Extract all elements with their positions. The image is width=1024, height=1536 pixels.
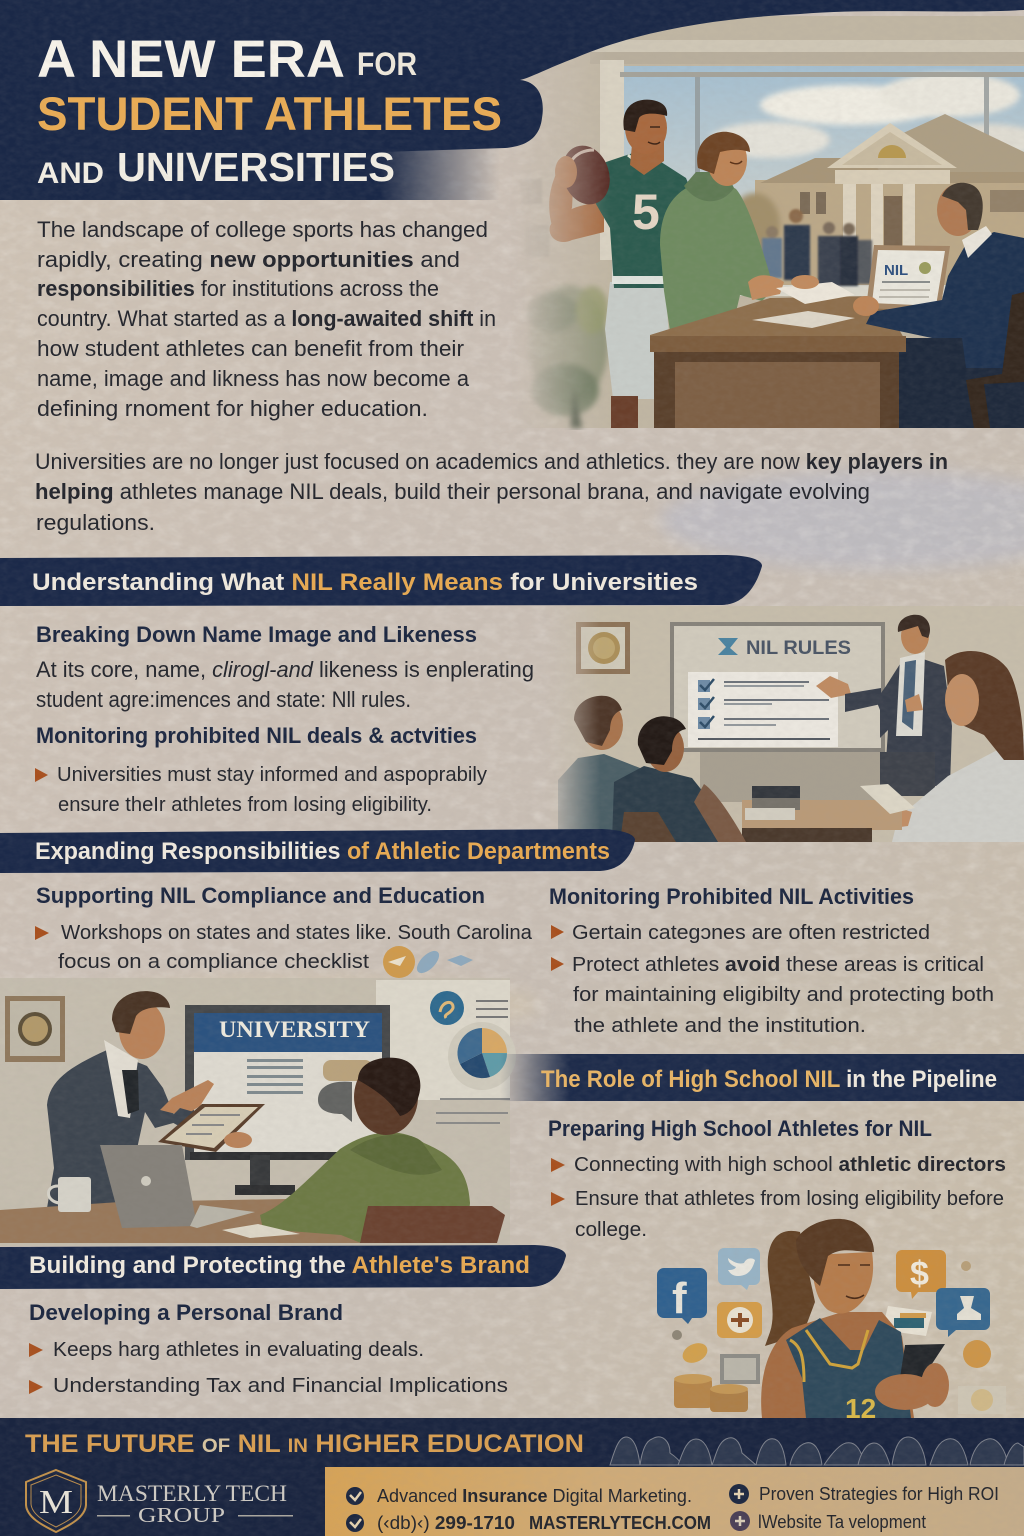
football player in jersey 5: 5 [632,184,660,240]
social media athlete illustration [657,1219,1006,1424]
whiteboard: NIL RULES [746,638,851,659]
framed seal [576,622,630,674]
framed seal [5,996,65,1062]
two seated students [558,696,746,842]
twitter bubble [718,1248,760,1290]
background campus windows [537,180,548,255]
intro paragraph: how student athletes can benefit from their [37,336,464,361]
prohibited activities text block: Gertain categↄnes are often restricted [572,922,930,944]
monitoring deals subsection [35,723,487,816]
monitor with university screen: UNIVERSITY [219,1017,370,1042]
personal brand text block: Developing a Personal Brand [29,1300,343,1325]
classroom wall [545,606,1024,842]
section banner: athletic departments: Expanding Responsibilities of Athletic Departments [35,838,610,865]
contact panel [325,1467,1024,1536]
shield logo: M [39,1484,73,1521]
wooden chair [360,1206,505,1243]
shield logo [26,1470,86,1532]
monitoring deals subsection: ensure theIr athletes from losing eligibility. [58,794,432,816]
paper on table [222,1224,300,1238]
dollar bubble [896,1250,946,1299]
NIL checklist [688,672,838,747]
plus gold bubble [717,1302,762,1338]
student in olive hoodie [260,1058,470,1243]
section banner: athlete's brand: Building and Protecting the Athlete's Brand [29,1252,530,1279]
compliance text block: Workshops on states and states like. South Carolina [61,922,533,944]
compliance text block [35,883,533,973]
campus building [730,114,1024,285]
small badges [672,1261,1006,1414]
title text: STUDENT ATHLETES [37,87,502,140]
presenter [816,615,952,796]
title text: A NEW ERA [37,30,345,89]
section banner: understanding NIL [0,555,762,606]
NIL rules classroom illustration [545,606,1024,842]
compliance text block: Supporting NIL Compliance and Education [36,883,485,908]
footer band: future of NIL [0,1418,1024,1536]
high school NIL text block [548,1116,1006,1241]
footer band: future of NIL: THE FUTURE OF NIL IN HIGHER EDUCATION [25,1430,584,1458]
personal brand text block: Understanding Tax and Financial Implications [53,1375,508,1397]
athlete with phone: 12 [845,1393,876,1424]
services column left: (‹db)‹) 299-1710 [377,1513,515,1533]
NIL certificate sign: NIL [884,262,908,279]
coin stacks [674,1374,748,1412]
hero illustration: athletes signing NIL deal at desk [510,16,1024,428]
second paragraph: helping athletes manage NIL deals, build their personal brana, and navigate evolving [35,479,870,504]
section banner: athlete's brand [0,1245,566,1289]
crowd of students [762,209,872,286]
company name [97,1481,293,1527]
section 2 subheading and text: At its core, name, clirogl-and likeness is enplerating [36,657,534,682]
small floating icons [383,946,473,978]
office wall [0,978,510,1246]
desk with books and papers [742,784,915,842]
company name: GROUP [138,1503,225,1527]
personal brand text block [29,1300,508,1397]
section 2 subheading and text: Breaking Down Name Image and Likeness [36,622,477,647]
services column left: MASTERLYTECH.COM [529,1513,711,1533]
intro paragraph: responsibilities for institutions across the [37,276,439,301]
seated woman [892,651,1024,842]
services column left [346,1486,711,1533]
high school NIL text block: Connecting with high school athletic directors [574,1154,1006,1176]
athlete with phone [761,1219,949,1424]
intro paragraph: name, image and likness has now become a [37,366,470,391]
tablet clipboard [158,1104,265,1152]
advisor in grey suit [47,991,214,1208]
office chair [966,292,1024,428]
prohibited activities text block: Protect athletes avoid these areas is critical [572,954,984,976]
compliance text block: focus on a compliance checklist [58,951,369,973]
chart card [882,1306,932,1336]
window with sky and clouds [560,40,1024,296]
section 2 subheading and text: student agre:imences and state: Nll rules. [36,687,411,712]
dollar bubble: $ [910,1255,929,1293]
facebook bubble: f [672,1274,687,1323]
prohibited activities text block: for maintaining eligibilty and protecting both [573,984,994,1006]
low wall panel [700,752,890,802]
profile bubble [936,1288,990,1337]
man's trousers and dark side of room [897,338,1024,428]
monitoring deals subsection: Universities must stay informed and aspoprabily [57,764,487,786]
plants [526,285,608,428]
NIL certificate sign [866,245,950,312]
prohibited activities text block: the athlete and the institution. [574,1015,866,1037]
whiteboard [670,622,885,752]
laptop [100,1145,255,1228]
services column right [729,1484,999,1532]
room wall [510,16,1024,428]
title text [37,30,502,190]
high school NIL text block: Preparing High School Athletes for NIL [548,1116,932,1141]
intro paragraph: defining rnoment for higher education. [37,396,428,421]
man in navy suit [853,183,1024,368]
title text: FOR [357,46,417,82]
services column left: Advanced Insurance Digital Marketing. [377,1486,692,1506]
personal brand text block: Keeps harg athletes in evaluating deals. [53,1339,424,1361]
intro paragraph [37,217,496,421]
section banner: high school NIL: The Role of High School NIL in the Pipeline [541,1066,997,1093]
coffee mug [48,1177,91,1212]
second paragraph: regulations. [36,510,155,535]
wooden table [0,1198,470,1243]
section banner: athletic departments [0,829,635,873]
title text: UNIVERSITIES [117,144,395,190]
title banner [0,0,1024,200]
prohibited activities text block: Monitoring Prohibited NIL Activities [549,884,914,909]
wooden desk [650,296,906,428]
intro paragraph: rapidly, creating new opportunities and [37,247,460,272]
section banner: high school NIL [500,1054,1024,1101]
university advising illustration [0,946,516,1246]
dashboard panel with pie chart [376,980,516,1124]
second paragraph [35,449,948,535]
football player in jersey 5 [549,100,690,428]
company name: MASTERLY TECH [97,1481,287,1506]
intro paragraph: country. What started as a long-awaited shift in [37,306,496,331]
silhouette crowd [610,1437,1024,1465]
student in green hoodie [660,132,784,331]
facebook bubble [657,1268,707,1324]
second paragraph: Universities are no longer just focused on academics and athletics. they are now key players in [35,449,948,474]
services column right: Proven Strategies for High ROI [759,1484,999,1504]
high school NIL text block: Ensure that athletes from losing eligibility before [575,1188,1004,1210]
monitoring deals subsection: Monitoring prohibited NIL deals & actvities [36,723,477,748]
papers on the desk [752,275,855,328]
monitor with university screen [185,1005,390,1195]
section 2 subheading and text [36,622,534,712]
title text: AND [37,157,104,190]
high school NIL text block: college. [575,1219,647,1241]
services column right: lWebsite Ta velopment [758,1512,926,1532]
section banner: understanding NIL: Understanding What NIL Really Means for Universities [32,569,698,596]
intro paragraph: The landscape of college sports has changed [37,217,488,242]
prohibited activities text block [549,884,994,1037]
